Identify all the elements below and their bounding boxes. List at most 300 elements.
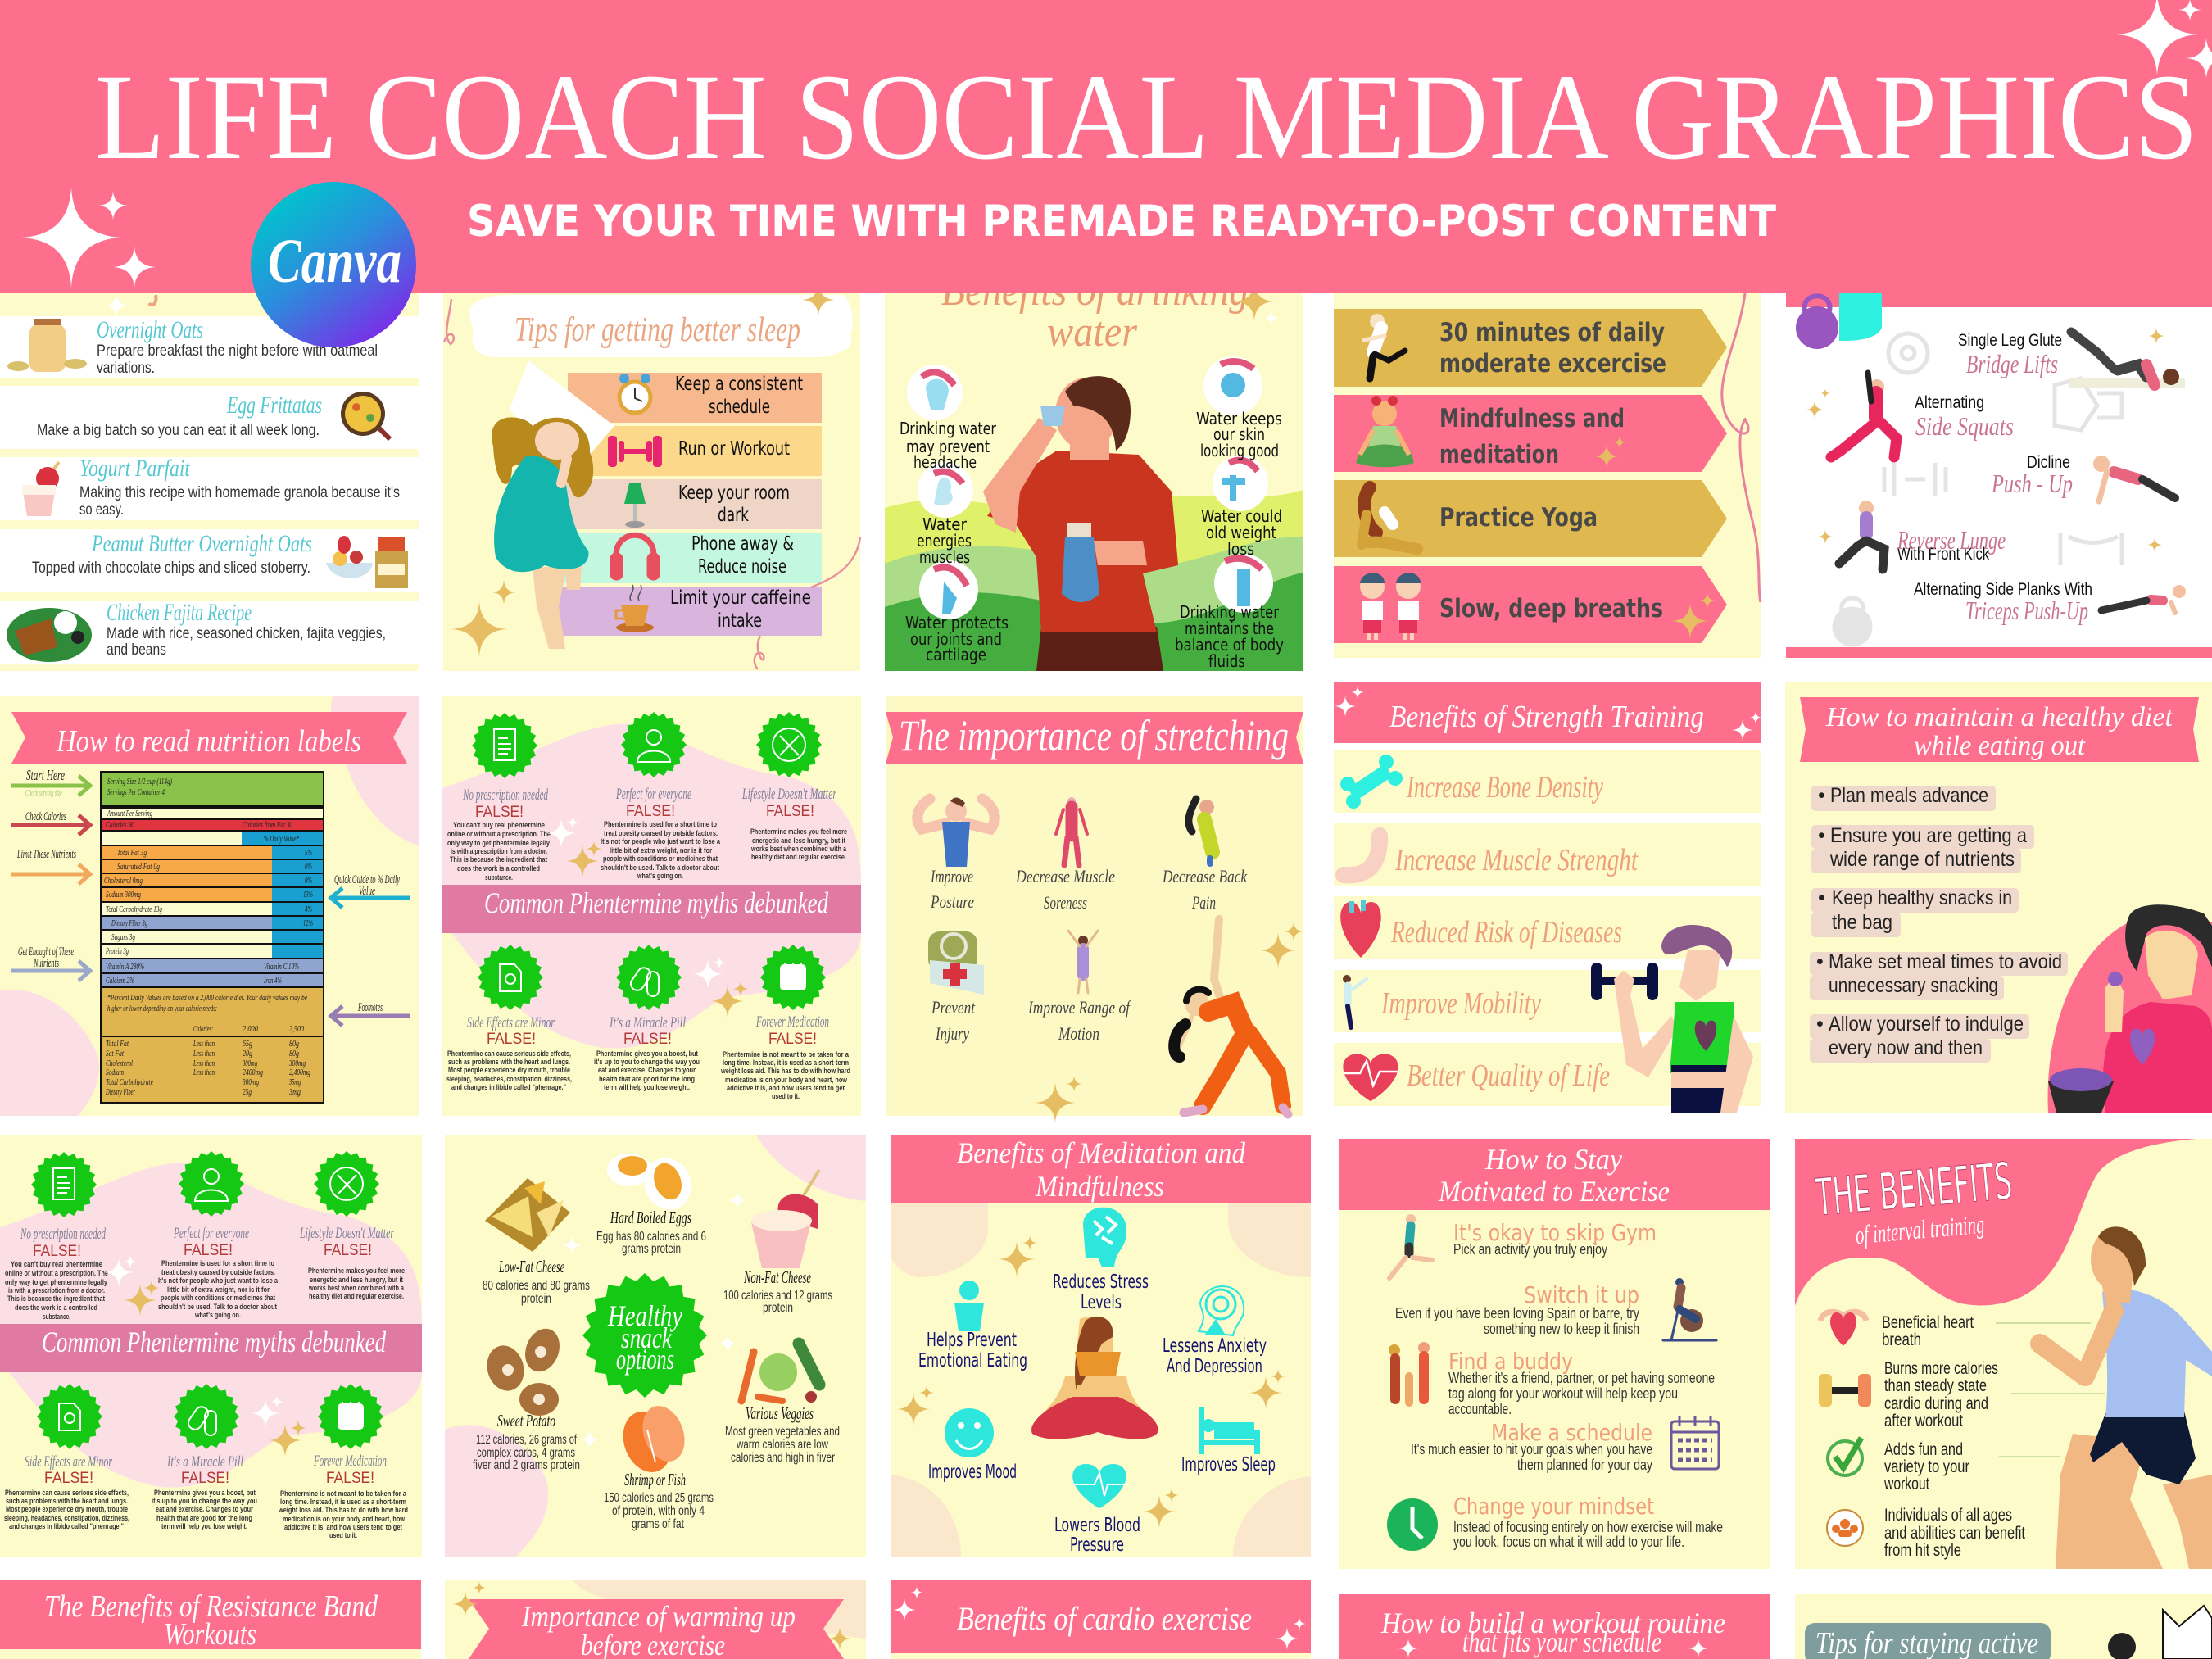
benefit labels: Improves Mood xyxy=(928,1462,1017,1483)
illustration: bandage roll xyxy=(928,931,984,995)
recipe descriptions: so easy. xyxy=(79,501,124,519)
benefit labels xyxy=(930,866,1248,1044)
myth descriptions: and changes in libido called "phenrage." xyxy=(451,1083,566,1092)
benefit labels: loss xyxy=(1227,539,1254,559)
center badge: snack xyxy=(621,1321,673,1354)
icon: yogurt parfait xyxy=(22,462,59,516)
center badge: Healthy xyxy=(607,1299,682,1332)
icon: smiley xyxy=(945,1408,994,1457)
snack names: Various Veggies xyxy=(746,1403,814,1423)
icon: alarm clock xyxy=(619,374,650,413)
tip text: dark xyxy=(718,505,749,526)
snack details: 150 calories and 25 grams xyxy=(604,1491,714,1505)
table text: Vitamin C 10% xyxy=(264,962,299,972)
FALSE labels: FALSE! xyxy=(768,1031,817,1048)
FALSE labels: FALSE! xyxy=(475,804,524,821)
header band xyxy=(1339,1139,1770,1210)
myth descriptions: health that are good for the long xyxy=(156,1514,252,1523)
header band: Mindfulness xyxy=(1035,1170,1164,1203)
exercise labels: Alternating Side Planks With xyxy=(1914,580,2092,599)
icon: heartbeat xyxy=(1343,1054,1398,1101)
title band xyxy=(442,885,861,933)
myth descriptions xyxy=(446,820,850,1101)
table text: Less than xyxy=(193,1058,215,1068)
illustration: figure with raised arms xyxy=(2108,1606,2212,1659)
table text: Total Fat xyxy=(106,1039,129,1049)
benefit text: Individuals of all ages xyxy=(1884,1506,2012,1525)
benefit labels: may prevent xyxy=(906,437,990,456)
illustration: man drinking water xyxy=(983,376,1178,671)
FALSE labels: FALSE! xyxy=(487,1031,536,1048)
benefit labels: Improves Sleep xyxy=(1181,1454,1276,1475)
recipe headings: Egg Frittatas xyxy=(226,392,322,419)
snack names: Non-Fat Cheese xyxy=(743,1267,811,1287)
icon: oats jar xyxy=(7,319,87,372)
illustration: back pain xyxy=(1189,799,1214,863)
tip headings xyxy=(1448,1219,1657,1520)
table text: Total Carbohydrate xyxy=(106,1077,153,1087)
icon: bone xyxy=(1340,755,1403,809)
arrow text: Slow, deep breaths xyxy=(1439,594,1663,623)
recipe descriptions: Making this recipe with homemade granola because it's xyxy=(79,484,400,501)
recipe headings xyxy=(79,316,322,626)
title ribbon xyxy=(11,712,407,764)
FALSE labels: FALSE! xyxy=(324,1242,372,1259)
callout labels: Quick Guide to % Daily xyxy=(334,873,400,886)
benefit labels: Pain xyxy=(1191,892,1216,913)
tip descriptions: Even if you have been loving Spain or barre, try xyxy=(1395,1305,1639,1321)
sparkles xyxy=(21,0,2212,288)
arrow text: 30 minutes of daily xyxy=(1439,318,1665,347)
benefit text: Beneficial heart xyxy=(1882,1313,1974,1332)
myth descriptions: what's going on. xyxy=(194,1311,241,1320)
snack names xyxy=(497,1208,814,1489)
myth descriptions: term will help you lose weight. xyxy=(161,1522,247,1531)
illustration: friends group xyxy=(1389,1342,1430,1403)
table text: Sodium 300mg xyxy=(106,890,141,900)
benefit text: from hit style xyxy=(1884,1541,1961,1560)
nutrition facts table xyxy=(100,771,324,1104)
myth descriptions: does the work is a controlled xyxy=(457,864,540,873)
benefit text: Burns more calories xyxy=(1884,1359,1998,1378)
header band: Benefits of Meditation and xyxy=(957,1136,1246,1169)
benefit labels: Improve xyxy=(930,866,973,886)
tip text: • xyxy=(1818,886,1825,909)
myth descriptions: weight loss aid. This has to do with how hard xyxy=(278,1506,408,1515)
tip text: Allow yourself to indulge xyxy=(1829,1013,2024,1036)
callout labels: Limit These Nutrients xyxy=(16,848,76,861)
icon: calendar xyxy=(1671,1416,1719,1469)
table text: Less than xyxy=(193,1049,215,1058)
snack details: grams of fat xyxy=(632,1517,684,1531)
benefit text: than steady state xyxy=(1884,1376,1987,1395)
benefit labels: muscles xyxy=(919,547,970,567)
snack names: Shrimp or Fish xyxy=(624,1470,686,1489)
benefit labels: old weight xyxy=(1206,523,1276,542)
illustration: meditating woman xyxy=(1031,1317,1159,1439)
panel: exercise moves xyxy=(1786,293,2212,658)
myth descriptions: healthy diet and regular exercise. xyxy=(751,853,846,862)
tip text: Phone away & xyxy=(691,533,794,555)
exercise names xyxy=(1897,349,2088,625)
myth descriptions: such as problems with the heart and lungs. xyxy=(6,1497,128,1506)
center badge xyxy=(582,1273,707,1398)
tip descriptions: It's much easier to hit your goals when you have xyxy=(1411,1441,1652,1457)
header band: Benefits of Strength Training xyxy=(1389,700,1704,734)
illustration: running man xyxy=(2040,1226,2212,1569)
FALSE labels: FALSE! xyxy=(766,803,814,820)
table text: Cholesterol 0mg xyxy=(104,876,143,886)
benefit text: workout xyxy=(1883,1475,1929,1494)
illustration: muscle anatomy xyxy=(1056,797,1087,865)
icon: community circle xyxy=(1827,1510,1863,1546)
benefit labels: Improve Mobility xyxy=(1380,986,1541,1021)
benefit labels: Helps Prevent xyxy=(927,1330,1017,1351)
myth descriptions: and changes in libido called "phenrage." xyxy=(9,1522,124,1531)
myth titles: Forever Medication xyxy=(755,1013,829,1031)
myth titles: It's a Miracle Pill xyxy=(609,1014,686,1031)
exercise labels: With Front Kick xyxy=(1897,545,1989,564)
table text: 4% xyxy=(305,904,312,914)
icon: peanut butter and bowl xyxy=(326,536,408,588)
panel: common Phentermine myths debunked (second copy) xyxy=(0,1135,422,1557)
benefit text: cardio during and xyxy=(1884,1394,1988,1413)
table text: 0% xyxy=(305,876,312,886)
myth descriptions: used to it. xyxy=(772,1092,800,1101)
table text: Total Carbohydrate 13g xyxy=(106,904,162,914)
icon: emotional figure xyxy=(954,1281,984,1331)
tip headings: Find a buddy xyxy=(1448,1348,1573,1375)
table text: Sat Fat xyxy=(106,1049,125,1058)
panel: how to maintain a healthy diet xyxy=(1785,682,2212,1113)
background hills xyxy=(885,490,1303,671)
title ribbon: How to maintain a healthy diet xyxy=(1825,702,2174,732)
benefit text: and abilities can benefit xyxy=(1884,1524,2025,1543)
heading: Benefits of drinking xyxy=(941,268,1249,315)
title band xyxy=(0,1324,422,1372)
snack names: Low-Fat Cheese xyxy=(498,1257,564,1276)
icon: heart with arms xyxy=(1820,1312,1866,1346)
illustration: side plank xyxy=(2101,585,2186,613)
myth descriptions: little bit of extra weight, nor is it for xyxy=(167,1285,270,1294)
exercise labels: Single Leg Glute xyxy=(1958,331,2062,350)
myth descriptions: treat obesity caused by outside factors. xyxy=(604,829,718,838)
snack details: protein xyxy=(521,1292,551,1306)
FALSE labels: FALSE! xyxy=(181,1470,229,1487)
icon: sweet potatoes xyxy=(483,1324,565,1416)
tip descriptions: accountable. xyxy=(1448,1401,1512,1417)
benefit labels: Emotional Eating xyxy=(918,1350,1027,1371)
recipe headings: Overnight Oats xyxy=(97,316,203,343)
panel: benefits of interval training xyxy=(1795,1139,2212,1569)
myth descriptions: Most people experience dry mouth, trouble xyxy=(6,1505,128,1514)
FALSE labels xyxy=(475,803,817,1048)
panel: benefits of meditation and mindfulness xyxy=(891,1135,1311,1557)
table text: 20g xyxy=(243,1049,252,1058)
exercise labels: Dicline xyxy=(2027,453,2070,472)
table text: Calories from Fat 30 xyxy=(243,820,292,830)
title ribbon: How to read nutrition labels xyxy=(56,724,361,759)
benefit labels: headache xyxy=(913,452,977,472)
header band xyxy=(891,1135,1311,1203)
exercise names: Bridge Lifts xyxy=(1966,349,2058,378)
table text: Calories 90 xyxy=(106,820,134,830)
illustration: child raising arms xyxy=(1068,931,1098,993)
illustration: sleeping woman xyxy=(492,360,614,649)
table text: 80g xyxy=(289,1049,299,1058)
table text: 2,400mg xyxy=(289,1067,310,1077)
myth descriptions: substance. xyxy=(43,1312,70,1321)
snack names: Sweet Potato xyxy=(497,1411,555,1430)
myth descriptions: Phentermine makes you feel more xyxy=(308,1267,405,1276)
table text: 300mg xyxy=(242,1077,259,1087)
benefit labels xyxy=(1380,770,1639,1093)
icon: heartbeat xyxy=(1070,1464,1129,1508)
banner xyxy=(0,0,2212,293)
table text xyxy=(104,777,313,1097)
panel: benefits of resistance band workouts: The Benefits of Resistance Band xyxy=(44,1589,378,1624)
illustration: meditating figure xyxy=(1356,396,1414,467)
panel: how to build a workout routine: How to build a workout routine xyxy=(1380,1607,1725,1639)
title ribbon: while eating out xyxy=(1914,731,2086,761)
table text: Servings Per Container 4 xyxy=(107,787,165,797)
myth descriptions: eat and exercise. Changes to your xyxy=(156,1505,253,1514)
myth descriptions: used to it. xyxy=(329,1531,357,1540)
panel: how to read nutrition labels xyxy=(0,696,419,1116)
myth descriptions: Phentermine is used for a short time to xyxy=(161,1259,274,1268)
table text: % Daily Value* xyxy=(264,834,299,844)
tip descriptions: Whether it's a friend, partner, or pet having someone xyxy=(1448,1370,1715,1386)
icon: headphones xyxy=(613,535,657,578)
table text: Dietary Fiber xyxy=(105,1087,135,1097)
callout labels: Check serving size xyxy=(25,788,62,798)
tip text xyxy=(1816,784,2062,1059)
myth descriptions: shouldn't be used. Talk to a doctor about xyxy=(601,863,720,873)
icon: frittata pan xyxy=(341,392,390,439)
illustration: runner xyxy=(1364,314,1405,378)
recipe descriptions: Made with rice, seasoned chicken, fajita veggies, xyxy=(107,625,386,642)
recipe descriptions: and beans xyxy=(107,641,166,659)
icon: lamp xyxy=(624,483,646,528)
benefit labels: maintains the xyxy=(1185,619,1274,638)
myth titles: No prescription needed xyxy=(20,1226,106,1243)
title ribbon xyxy=(1800,697,2199,762)
recipe headings: Chicken Fajita Recipe xyxy=(107,599,252,626)
myth descriptions: online or without a prescription. The xyxy=(447,830,551,839)
myth descriptions: sleeping, headaches, constipation, dizziness, xyxy=(4,1514,129,1523)
myth descriptions: eat and exercise. Changes to your xyxy=(598,1066,696,1075)
heading: THE BENEFITS xyxy=(1813,1151,2015,1227)
benefit labels: Water protects xyxy=(905,613,1009,632)
myth descriptions: Phentermine is used for a short time to xyxy=(604,820,717,829)
benefit text: breath xyxy=(1882,1330,1921,1349)
benefit labels: fluids xyxy=(1208,651,1245,671)
tip descriptions: Pick an activity you truly enjoy xyxy=(1453,1241,1607,1258)
myth titles xyxy=(20,1225,394,1471)
table text: Cholesterol xyxy=(106,1058,133,1068)
snack details: 100 calories and 12 grams xyxy=(723,1289,832,1303)
FALSE labels: FALSE! xyxy=(184,1242,233,1259)
tip text: • xyxy=(1816,1013,1824,1036)
tip text: Limit your caffeine xyxy=(670,587,811,609)
tip rows xyxy=(546,373,822,636)
FALSE labels: FALSE! xyxy=(44,1470,93,1487)
myth descriptions: medication is on your body and heart, how xyxy=(725,1076,847,1085)
arrow text xyxy=(1439,318,1666,623)
FALSE labels xyxy=(33,1242,374,1487)
panel: benefits of strength training xyxy=(1334,682,1762,1113)
tip text: • xyxy=(1818,784,1825,807)
myth descriptions: it's up to you to change the way you xyxy=(152,1497,257,1506)
myth descriptions: This is because the ingredient that xyxy=(7,1294,106,1303)
table text: 2400mg xyxy=(243,1067,263,1077)
snack details: fiver and 2 grams protein xyxy=(473,1458,580,1472)
icon: moving person xyxy=(1343,975,1367,1027)
panel: importance of warming up: Importance of warming up xyxy=(521,1600,796,1633)
title ribbon: The importance of stretching xyxy=(899,711,1289,760)
exercise labels xyxy=(1897,331,2092,599)
FALSE labels: FALSE! xyxy=(623,1031,672,1048)
icon: chicken fajita on leaf xyxy=(7,608,92,662)
myth descriptions: It's not for people who just want to lose a xyxy=(601,837,721,846)
myth descriptions: Phentermine is not meant to be taken for a xyxy=(280,1489,407,1498)
tip headings: Change your mindset xyxy=(1453,1493,1654,1520)
icon: dumbbell xyxy=(1819,1374,1871,1407)
myth descriptions: energetic and less hungry, but it xyxy=(752,836,846,845)
benefit labels: Posture xyxy=(930,891,974,912)
myth descriptions: term will help you lose weight. xyxy=(604,1083,690,1092)
green badges xyxy=(31,1151,383,1449)
table text: higher or lower depending on your calorie needs: xyxy=(107,1004,217,1013)
illustration: side squat xyxy=(1831,373,1897,457)
table text: Iron 4% xyxy=(263,976,282,986)
tip text: • xyxy=(1818,824,1825,847)
myth descriptions: long time. Instead, it is used as a short-term xyxy=(723,1058,849,1067)
panel: benefits of resistance band workouts xyxy=(0,1580,421,1659)
icon: boiled eggs xyxy=(607,1151,698,1217)
icon: vegetables xyxy=(741,1344,819,1403)
tip text: wide range of nutrients xyxy=(1829,848,2015,871)
table text: 300mg xyxy=(242,1058,257,1068)
table text: 0% xyxy=(305,862,312,872)
panel: tips for better sleep xyxy=(443,283,860,671)
myth titles: Lifestyle Doesn't Matter xyxy=(299,1225,394,1242)
benefit labels: Motion xyxy=(1058,1023,1099,1044)
myth descriptions: It's not for people who just want to lose a xyxy=(158,1276,279,1285)
table text: Amount Per Serving xyxy=(107,809,152,818)
table text: Serving Size 1/2 cup (114g) xyxy=(107,777,172,786)
table text: Sugars 3g xyxy=(111,932,135,942)
benefit text: variety to your xyxy=(1884,1457,1969,1476)
tip text: the bag xyxy=(1832,911,1892,934)
icon: salmon xyxy=(615,1400,692,1479)
green badges xyxy=(472,712,826,1010)
icon: spiral head xyxy=(1199,1286,1244,1335)
heading xyxy=(1813,1151,2017,1253)
benefit labels: Increase Bone Density xyxy=(1406,770,1603,805)
icon: dumbbell xyxy=(608,436,662,467)
illustration: push up xyxy=(2093,456,2175,501)
heading ribbon: Tips for getting better sleep xyxy=(514,311,800,349)
table text: Less than xyxy=(193,1039,215,1049)
panel: how to build a workout routine xyxy=(1339,1594,1770,1659)
recipe descriptions: Prepare breakfast the night before with oatmeal xyxy=(97,342,378,360)
tip text: Plan meals advance xyxy=(1830,784,1988,807)
benefit labels: looking good xyxy=(1200,441,1279,460)
exercise names: Side Squats xyxy=(1915,411,2014,441)
illustration: two children xyxy=(1360,573,1421,640)
table text: 80g xyxy=(289,1039,299,1049)
exercise names: Reverse Lunge xyxy=(1897,525,2006,555)
callout labels: Check Calories xyxy=(25,810,66,823)
table text: Vitamin A 280% xyxy=(106,962,144,972)
tip headings: It's okay to skip Gym xyxy=(1453,1219,1657,1246)
myth titles: Side Effects are Minor xyxy=(467,1014,555,1031)
heading ribbon xyxy=(469,295,853,357)
callout labels: Value xyxy=(359,885,375,898)
myth descriptions: You can't buy real phentermine xyxy=(11,1260,102,1269)
heading: water xyxy=(1047,309,1138,356)
exercise labels: Alternating xyxy=(1915,393,1984,412)
myth descriptions: addictive it is, and how users tend to get xyxy=(727,1084,845,1093)
icon: bed xyxy=(1199,1407,1260,1454)
benefit labels: Reduces Stress xyxy=(1053,1271,1149,1293)
benefit labels: Levels xyxy=(1081,1292,1122,1313)
panel: healthy snack options xyxy=(445,1135,866,1557)
table text: Sodium xyxy=(106,1067,124,1077)
table text: 35mg xyxy=(288,1077,301,1087)
myth titles xyxy=(462,786,836,1031)
benefit labels: Decrease Back xyxy=(1162,866,1248,886)
benefit labels: Decrease Muscle xyxy=(1015,866,1115,886)
table text: Calcium 2% xyxy=(106,976,134,986)
tip descriptions: Instead of focusing entirely on how exercise will make xyxy=(1453,1519,1723,1535)
tip descriptions: something new to keep it finish xyxy=(1484,1321,1639,1337)
exercise names: Triceps Push-Up xyxy=(1965,596,2088,625)
myth descriptions: works best when combined with a xyxy=(308,1284,405,1293)
illustration: woman eating xyxy=(2048,904,2212,1113)
myth titles: Perfect for everyone xyxy=(615,786,691,803)
snack details xyxy=(473,1230,840,1531)
benefit labels xyxy=(918,1271,1276,1556)
myth descriptions xyxy=(4,1259,408,1540)
badge icons xyxy=(494,728,805,996)
callout arrows xyxy=(11,776,410,1026)
myth descriptions: Most people experience dry mouth, trouble xyxy=(448,1066,570,1075)
panel: how to stay motivated to exercise xyxy=(1339,1139,1770,1569)
faint gym equipment xyxy=(1834,333,2122,645)
panel: benefits of cardio exercise xyxy=(891,1580,1311,1659)
myth titles: Perfect for everyone xyxy=(173,1225,249,1242)
tip descriptions: tag along for your workout will help keep you xyxy=(1448,1385,1678,1402)
callout labels: Start Here xyxy=(26,767,65,783)
panel: common Phentermine myths debunked xyxy=(442,696,861,1116)
myth descriptions: what's going on. xyxy=(637,872,683,881)
panel: stress relief arrows xyxy=(1334,293,1761,658)
myth titles: No prescription needed xyxy=(462,786,548,804)
tip headings: Make a schedule xyxy=(1491,1419,1652,1446)
tip text: every now and then xyxy=(1829,1036,1983,1059)
myth descriptions: shouldn't be used. Talk to a doctor about xyxy=(158,1303,278,1312)
benefit labels: Reduced Risk of Diseases xyxy=(1390,915,1622,950)
benefit labels: Water keeps xyxy=(1196,409,1282,428)
corner shapes xyxy=(891,1203,1311,1557)
benefit labels: Injury xyxy=(935,1023,969,1044)
snack details: Egg has 80 calories and 6 xyxy=(596,1230,706,1244)
callout labels xyxy=(16,767,400,1014)
tip descriptions xyxy=(1395,1241,1723,1550)
benefit labels: balance of body xyxy=(1175,635,1284,655)
